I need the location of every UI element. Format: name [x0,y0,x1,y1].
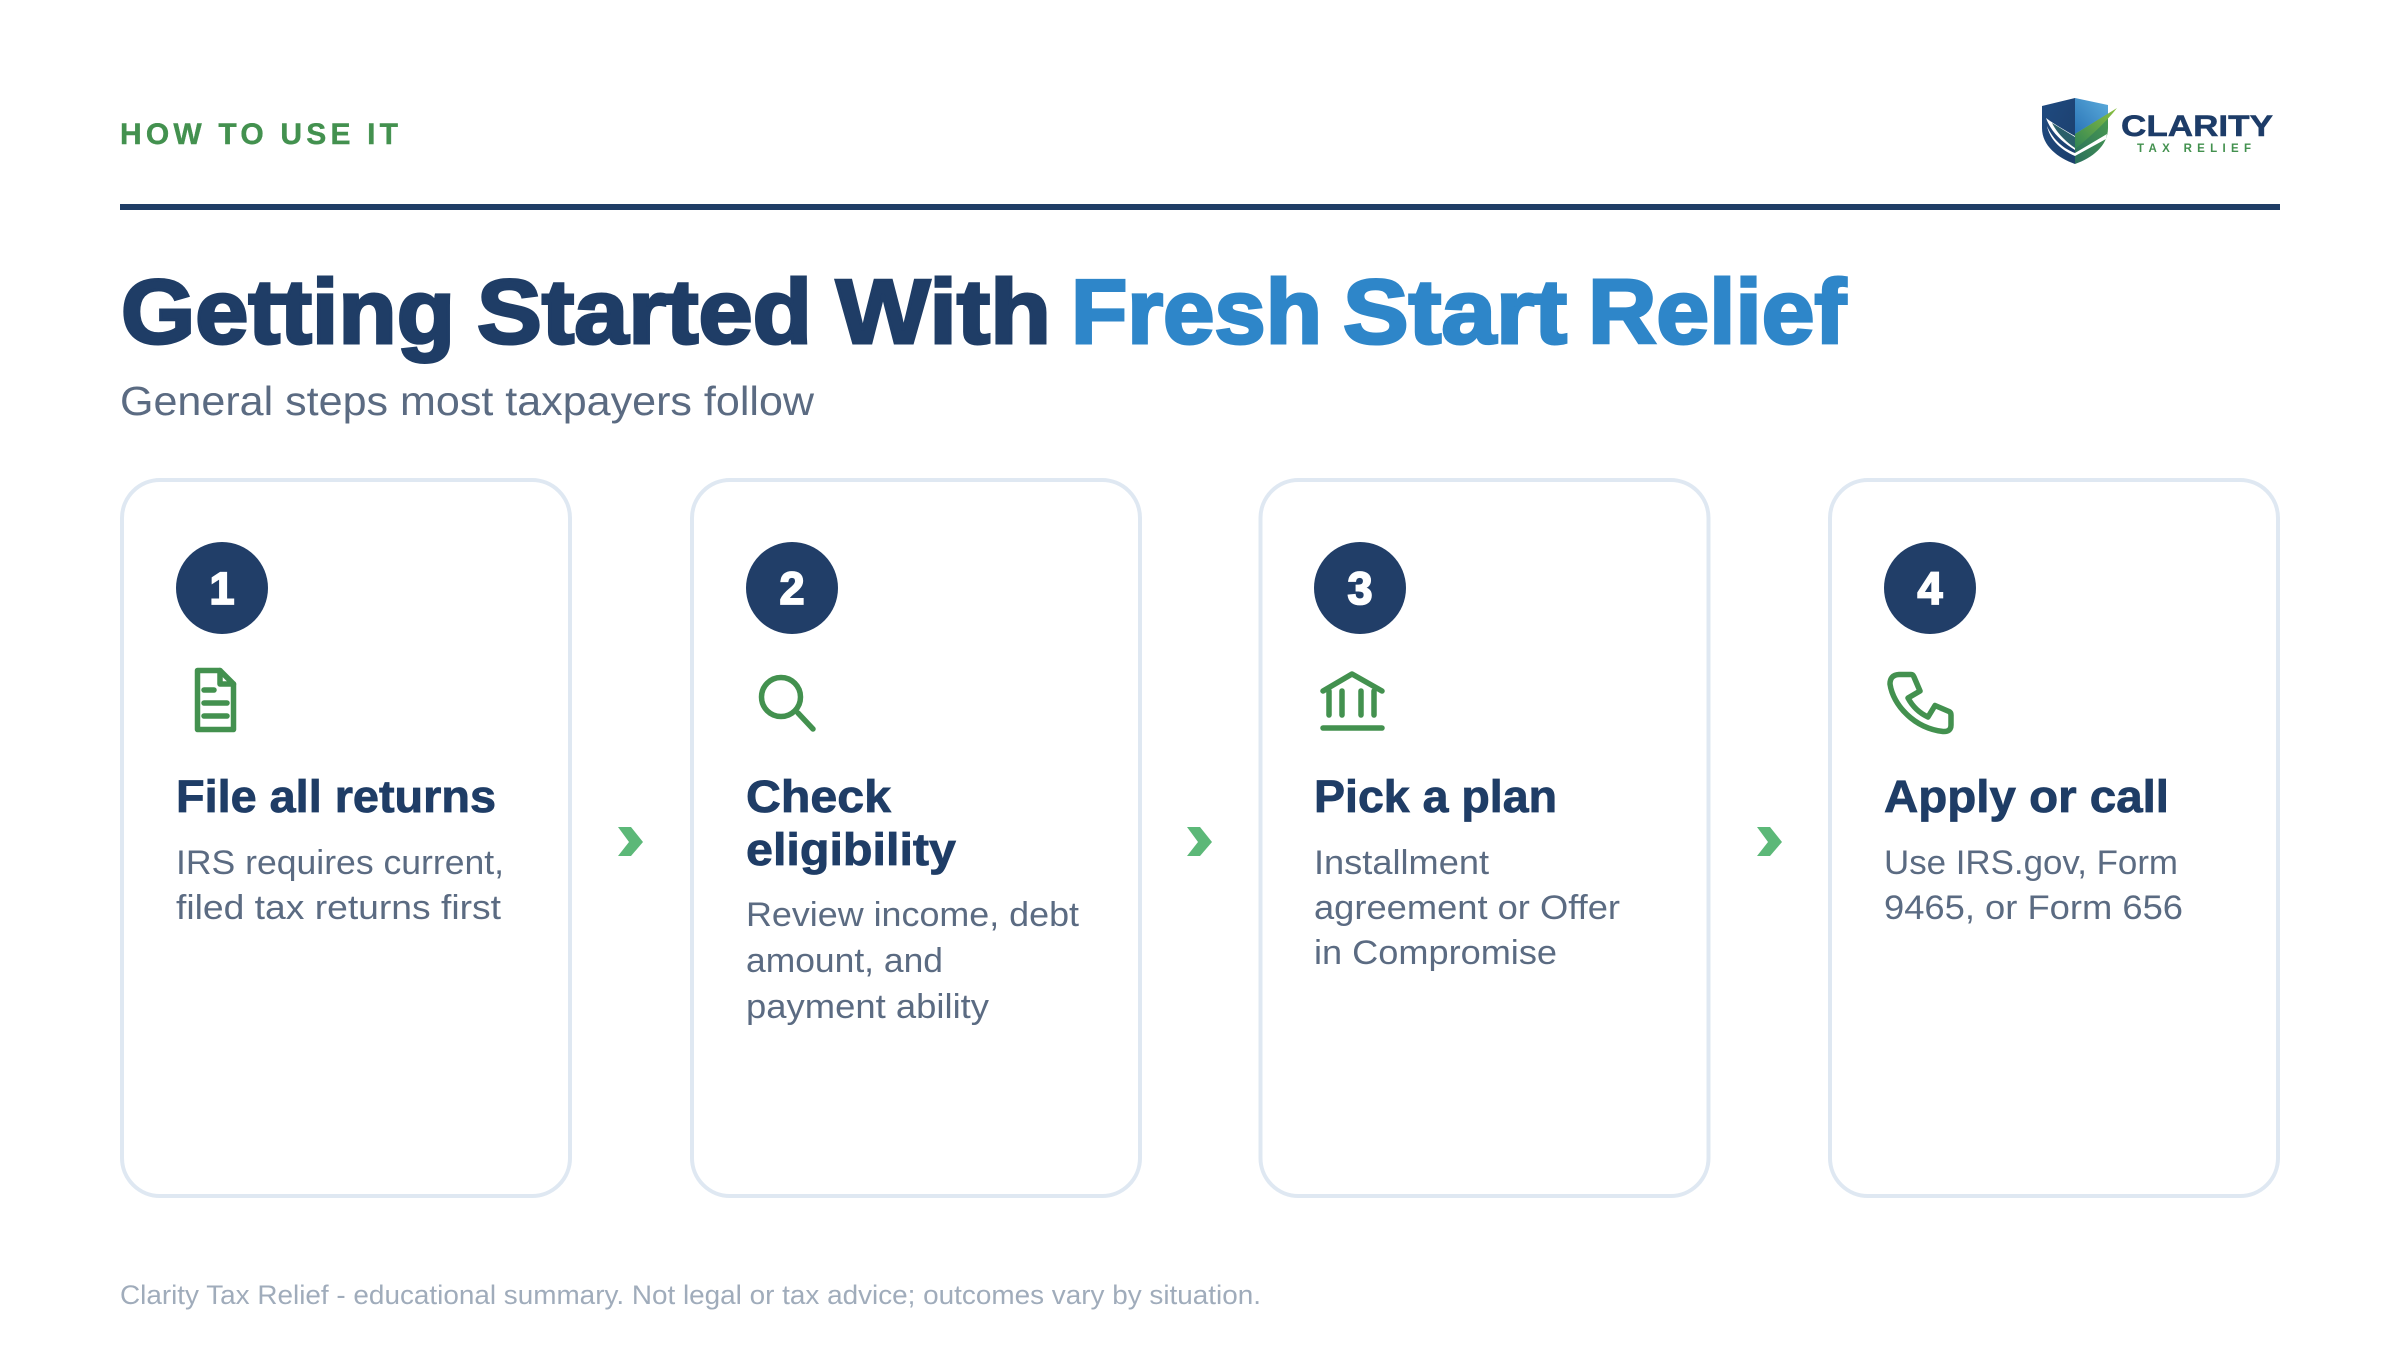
step number 4: 4 [1917,563,1943,614]
panel: step 3 pick a plan [1260,480,1708,1196]
step description: IRS requires current, [176,844,504,882]
step description: Review income, debt [746,896,1080,934]
step description [746,896,1080,1026]
step description [176,844,504,927]
step description: payment ability [746,988,989,1026]
arrow 1 [618,827,643,856]
icon: document [198,670,234,730]
title: Start [1343,262,1567,363]
title: Relief [1588,262,1847,363]
step number 4 [1884,542,1976,634]
arrow 3 [1757,827,1782,856]
step description: 9465, or Form 656 [1884,889,2183,927]
icon: magnifying glass [762,678,813,729]
footer disclaimer: Clarity Tax Relief - educational summary. Not legal or tax advice; outcomes vary by situation. [120,1280,1261,1310]
arrow 2 [1187,827,1212,856]
panel: step 2 check eligibility [692,480,1140,1196]
logo tagline: TAX RELIEF [2137,143,2251,155]
step heading: Pick a plan [1314,771,1557,822]
icon: bank building [1323,674,1382,728]
title: Fresh [1071,262,1322,363]
step description [1314,844,1620,972]
step description [1884,844,2183,927]
step number 1: 1 [209,563,235,614]
logo wordmark: CLARITY [2121,110,2273,143]
step description: filed tax returns first [176,889,502,927]
step number 2 [746,542,838,634]
logo: Clarity Tax Relief [2042,98,2273,164]
icon: phone [1890,674,1951,732]
step heading [746,771,956,875]
logo shield [2042,98,2117,164]
step description: in Compromise [1314,934,1557,972]
step heading: Check [746,771,892,822]
step number 1 [176,542,268,634]
step description: amount, and [746,942,943,980]
step heading: File all returns [176,771,496,822]
step description: agreement or Offer [1314,889,1620,927]
step heading: eligibility [746,824,956,875]
title: Getting [121,262,455,363]
header rule [120,204,2280,210]
panel: step 4 apply or call [1830,480,2278,1196]
step heading: Apply or call [1884,771,2169,822]
subtitle: General steps most taxpayers follow [120,378,814,424]
title: With [836,262,1051,363]
panel: step 1 file all returns [122,480,570,1196]
step number 2: 2 [779,563,805,614]
step number 3 [1314,542,1406,634]
title [121,262,1847,363]
eyebrow: how to use it: HOW TO USE IT [120,118,398,151]
title: Started [477,262,812,363]
step number 3: 3 [1347,563,1373,614]
step description: Use IRS.gov, Form [1884,844,2178,882]
step description: Installment [1314,844,1490,882]
